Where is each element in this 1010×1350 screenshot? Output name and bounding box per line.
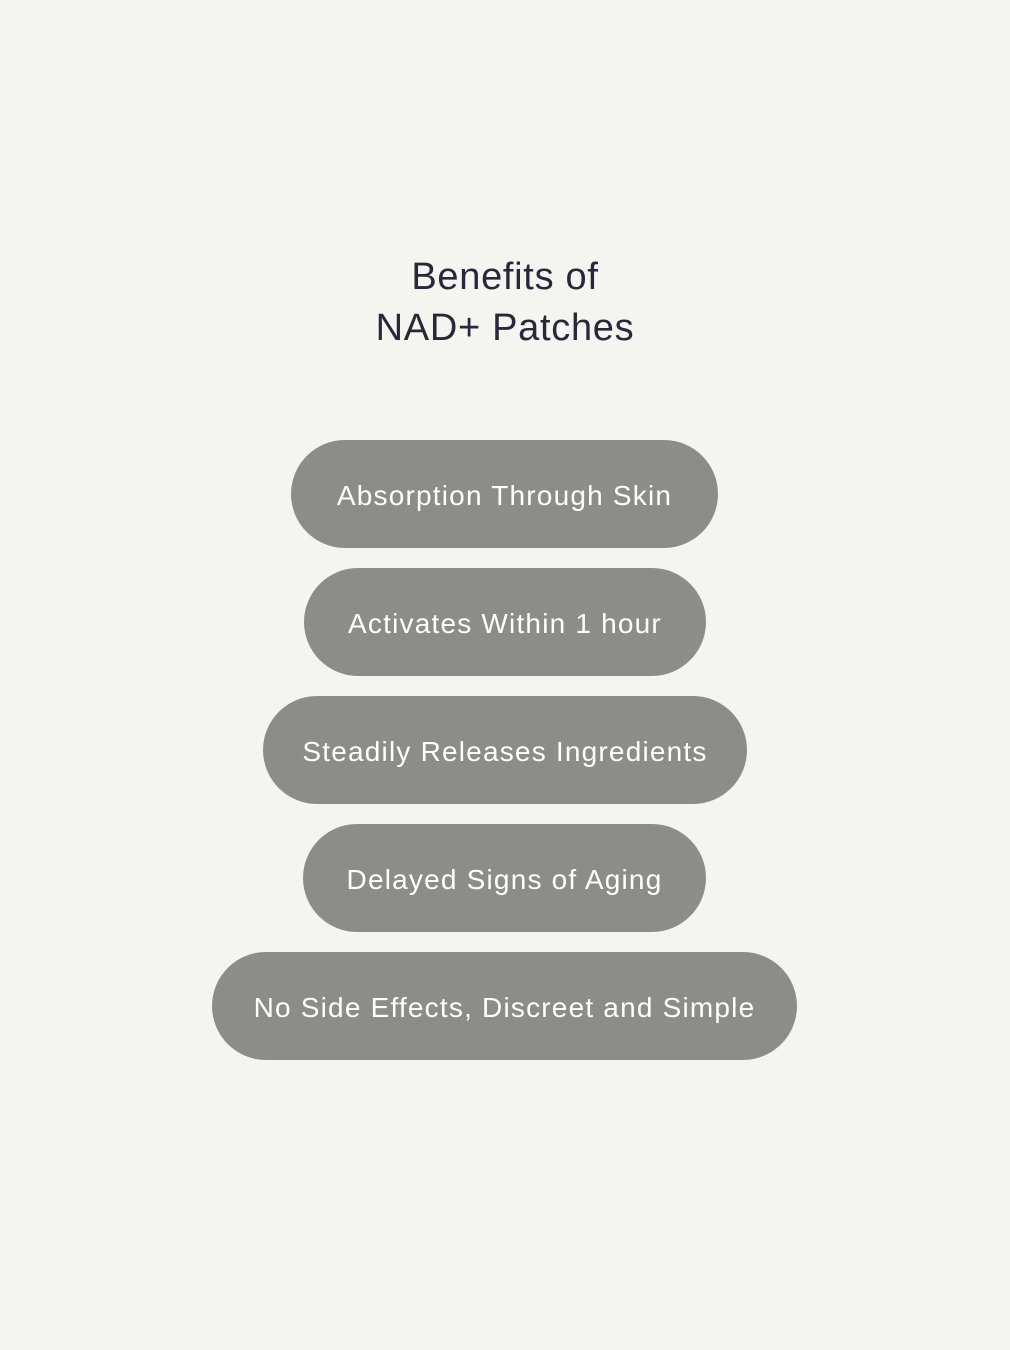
pill: aging: Delayed Signs of Aging (347, 864, 662, 894)
title: NAD+ Patches (376, 307, 634, 349)
pill: absorption (291, 440, 718, 548)
pill: releases: Steadily Releases Ingredients (302, 736, 708, 766)
pill: absorption: Absorption Through Skin (337, 480, 672, 510)
pill: side effects (212, 952, 797, 1060)
pill: activates: Activates Within 1 hour (348, 608, 662, 638)
pill: side effects: No Side Effects, Discreet and Simple (254, 992, 755, 1022)
pill: releases (263, 696, 747, 804)
pill: aging (303, 824, 706, 932)
pill: activates (304, 568, 706, 676)
title: Benefits of (411, 256, 599, 298)
title (376, 256, 634, 349)
